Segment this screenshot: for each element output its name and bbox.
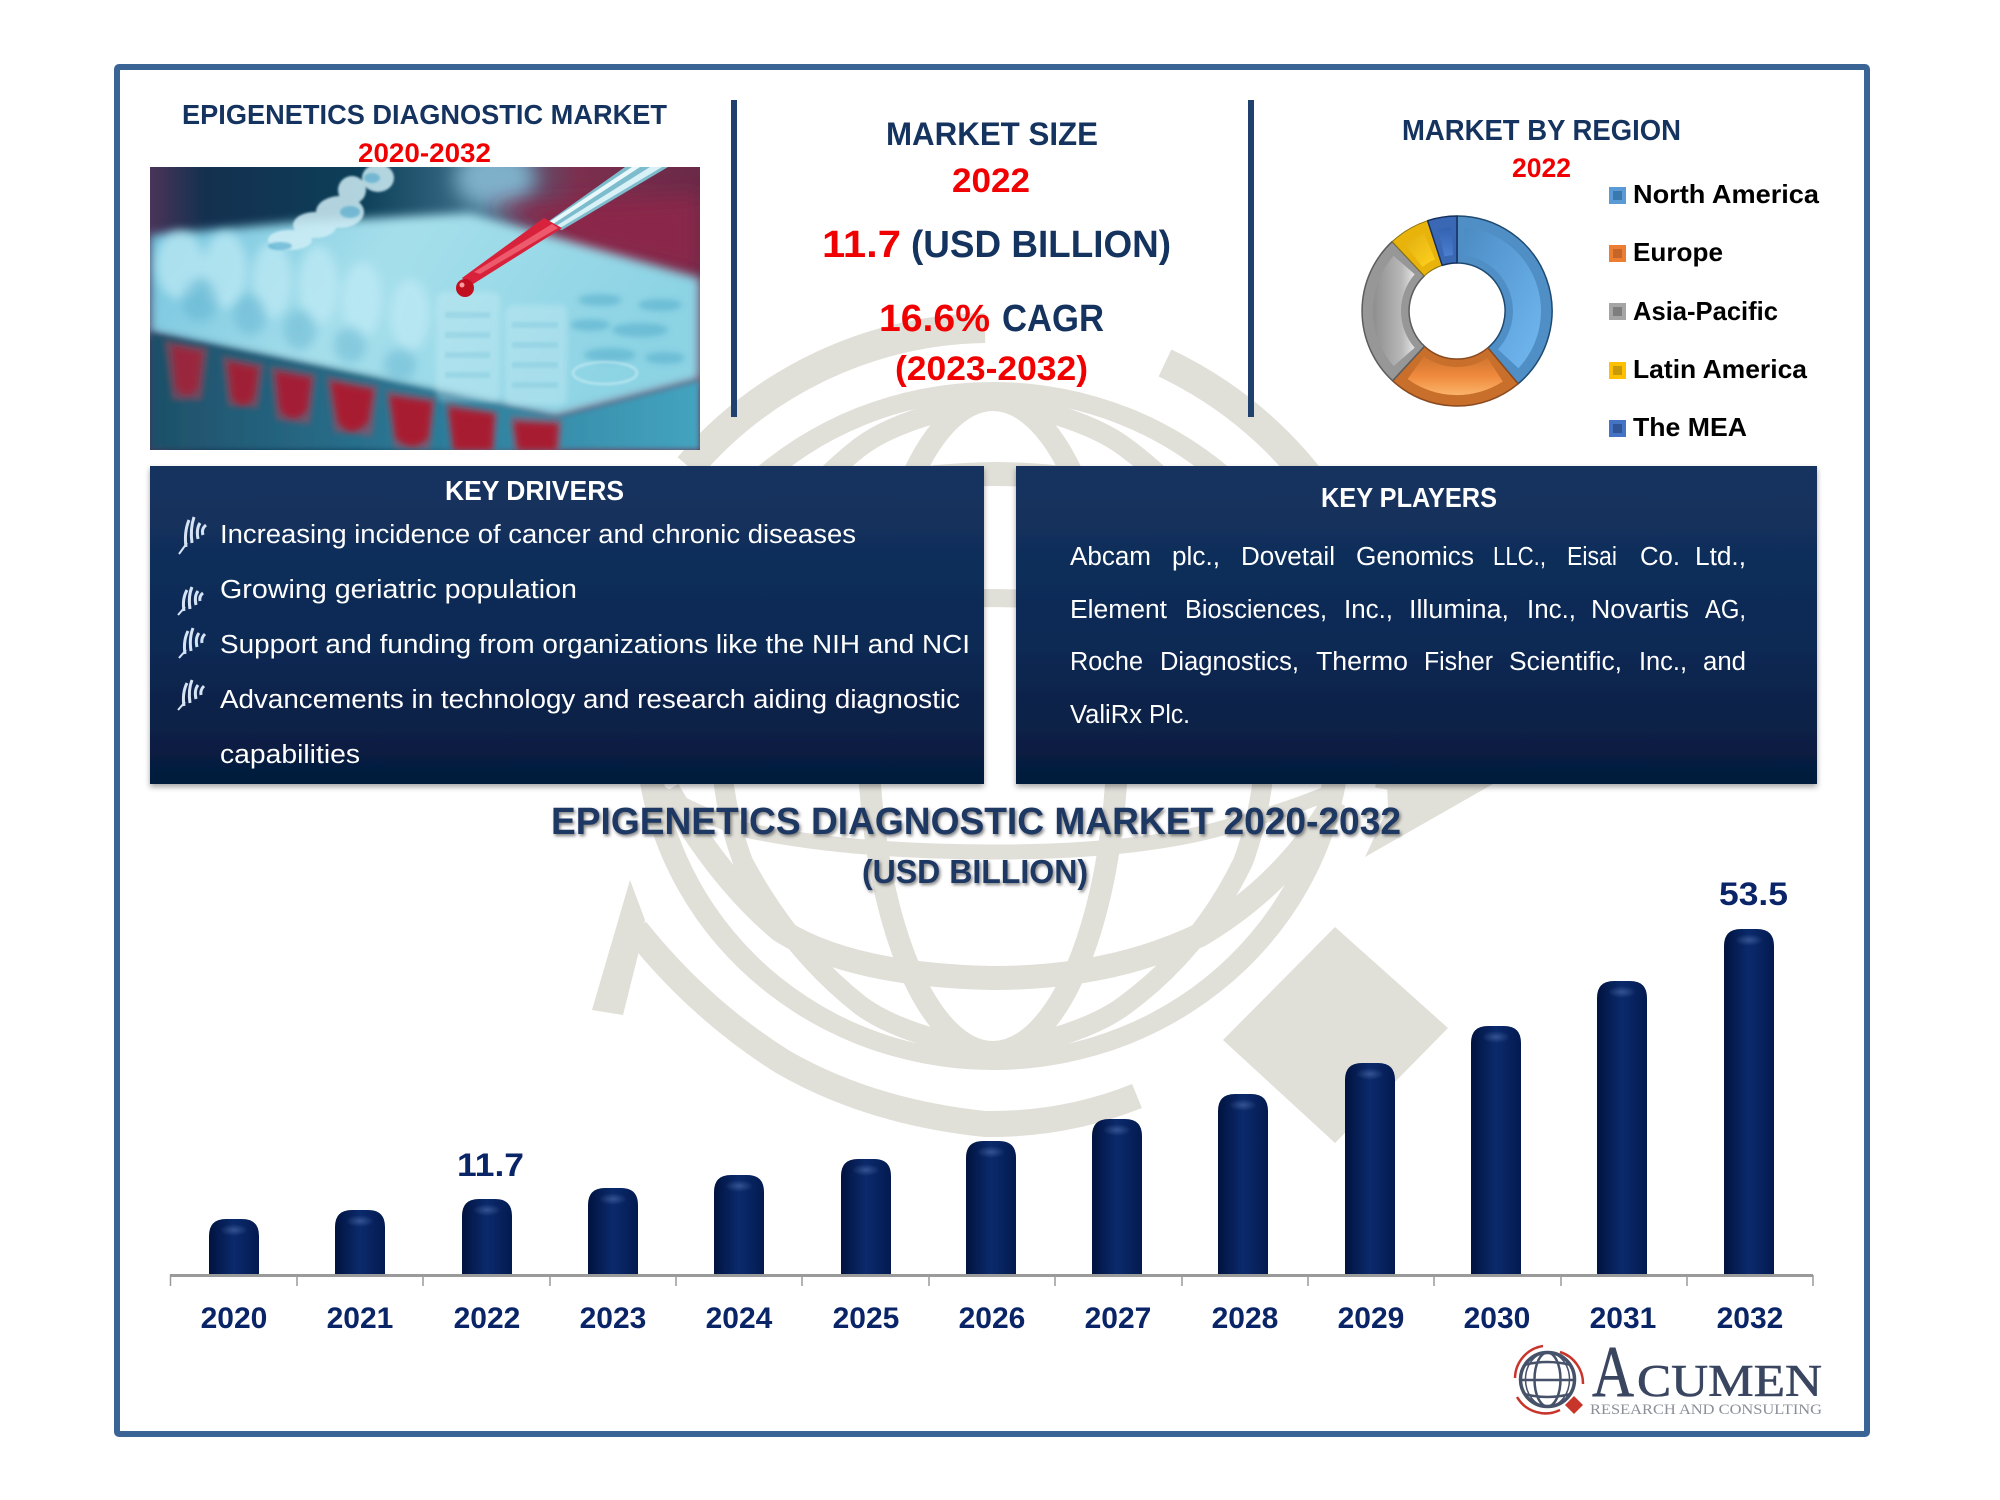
key players list: Abcam — [1070, 543, 1151, 571]
bar highlights — [220, 934, 1763, 1236]
donut chart: market by region — [1362, 216, 1552, 406]
market size block: CAGR — [1002, 298, 1104, 340]
year labels: 2030 — [1464, 1302, 1530, 1335]
bar chart: market size 2020-2032 — [170, 876, 1813, 1335]
key players list: plc., — [1172, 543, 1220, 571]
key players list: Co. — [1640, 543, 1680, 571]
key players list: AG, — [1705, 596, 1746, 624]
legend: regions — [1609, 179, 1820, 442]
key players list: Thermo — [1316, 648, 1408, 676]
value label 2032: 53.5 — [1719, 876, 1788, 912]
key players list: Roche — [1070, 648, 1143, 676]
heading: Epigenetics Diagnostic Market: EPIGENETICS DIAGNOSTIC MARKET — [182, 99, 667, 130]
bullet icon 4 — [178, 680, 204, 710]
year labels: 2020 — [201, 1302, 267, 1335]
legend item: North America: North America — [1633, 179, 1820, 209]
outer frame — [117, 67, 1867, 1434]
legend item: The MEA: The MEA — [1633, 412, 1747, 442]
legend item: Asia-Pacific: Asia-Pacific — [1633, 296, 1778, 326]
key players list: Plc. — [1149, 701, 1190, 729]
panel: key drivers — [150, 466, 984, 784]
key players list: Biosciences, — [1185, 596, 1327, 624]
key drivers heading: KEY DRIVERS — [445, 475, 624, 506]
year labels: 2021 — [327, 1302, 393, 1335]
year labels: 2023 — [580, 1302, 646, 1335]
market size block: (2023-2032) — [895, 350, 1088, 388]
heading: market by region: MARKET BY REGION — [1402, 115, 1681, 147]
value label 2022: 11.7 — [457, 1147, 524, 1183]
logo wordmark — [1592, 1331, 1822, 1412]
key players list: Eisai — [1567, 543, 1617, 571]
key players list: Inc., — [1639, 648, 1687, 676]
segment: Europe — [1393, 346, 1518, 406]
heading: Epigenetics Diagnostic Market: 2020-2032 — [358, 138, 491, 168]
segment: Latin America — [1392, 221, 1442, 276]
key players list: Novartis — [1591, 596, 1689, 624]
key drivers list: Increasing incidence of cancer and chronic diseases — [220, 521, 856, 549]
bullet icon 1 — [179, 517, 206, 554]
market size block: 11.7 — [822, 224, 901, 266]
key players list: Illumina, — [1409, 596, 1509, 624]
key players list: Inc., — [1527, 596, 1576, 624]
key drivers list: Advancements in technology and research aiding diagnostic — [220, 686, 960, 714]
bullet icon 2 — [178, 587, 203, 615]
key drivers list: Support and funding from organizations like the NIH and NCI — [220, 631, 970, 659]
chart title: EPIGENETICS DIAGNOSTIC MARKET 2020-2032 — [551, 801, 1401, 843]
panel: key players — [1016, 466, 1817, 784]
key players list: LLC., — [1493, 543, 1546, 571]
market size block: 2022 — [952, 162, 1030, 200]
heading: market by region: 2022 — [1512, 153, 1571, 183]
year labels: 2028 — [1212, 1302, 1278, 1335]
year labels: 2026 — [959, 1302, 1025, 1335]
key drivers list — [220, 521, 970, 769]
market size block: (USD BILLION) — [911, 224, 1171, 266]
year labels: 2025 — [833, 1302, 899, 1335]
legend item: Latin America: Latin America — [1633, 354, 1808, 384]
key drivers list: capabilities — [220, 741, 360, 769]
key players list: Genomics — [1356, 543, 1474, 571]
key players list — [1070, 543, 1746, 729]
bars — [209, 929, 1774, 1274]
key players list: Diagnostics, — [1160, 648, 1299, 676]
logo wordmark: A — [1592, 1331, 1634, 1412]
market size block — [822, 116, 1171, 388]
year labels: 2027 — [1085, 1302, 1151, 1335]
key players list: Fisher — [1424, 648, 1493, 676]
bullet icon 3 — [179, 628, 205, 658]
chart title — [551, 801, 1401, 890]
logo tagline: RESEARCH AND CONSULTING — [1590, 1402, 1823, 1418]
logo wordmark: CUMEN — [1637, 1356, 1822, 1406]
key players list: Inc., — [1344, 596, 1393, 624]
year labels: 2024 — [706, 1302, 773, 1335]
watermark globe logo — [592, 328, 1493, 1143]
year labels: 2029 — [1338, 1302, 1404, 1335]
axis — [170, 1275, 1813, 1286]
key players list: Dovetail — [1241, 543, 1335, 571]
key players list: Ltd., — [1695, 543, 1746, 571]
legend item: Europe: Europe — [1633, 237, 1723, 267]
market size block: 16.6% — [879, 298, 990, 340]
heading: market by region — [1402, 115, 1681, 183]
segment: Asia-Pacific — [1362, 242, 1424, 381]
key players list: Scientific, — [1509, 648, 1622, 676]
logo globe icon — [1515, 1346, 1583, 1414]
key players list: ValiRx — [1070, 701, 1142, 729]
market size block: MARKET SIZE — [886, 116, 1098, 152]
year labels: 2031 — [1590, 1302, 1656, 1335]
segment: The MEA — [1428, 216, 1457, 265]
key players list: Element — [1070, 596, 1167, 624]
key players list: and — [1703, 648, 1746, 676]
segment: North America — [1457, 216, 1552, 384]
year labels: 2022 — [454, 1302, 520, 1335]
logo: Acumen Research and Consulting — [1515, 1331, 1823, 1418]
year labels — [201, 1302, 1783, 1335]
photo: pipette dropping blood sample into well plate — [150, 148, 700, 450]
key drivers list: Growing geriatric population — [220, 576, 577, 604]
divider lines — [731, 100, 1254, 417]
key players heading: KEY PLAYERS — [1321, 482, 1497, 513]
year labels: 2032 — [1717, 1302, 1783, 1335]
heading: Epigenetics Diagnostic Market — [182, 99, 667, 168]
chart title: (USD BILLION) — [862, 853, 1088, 890]
